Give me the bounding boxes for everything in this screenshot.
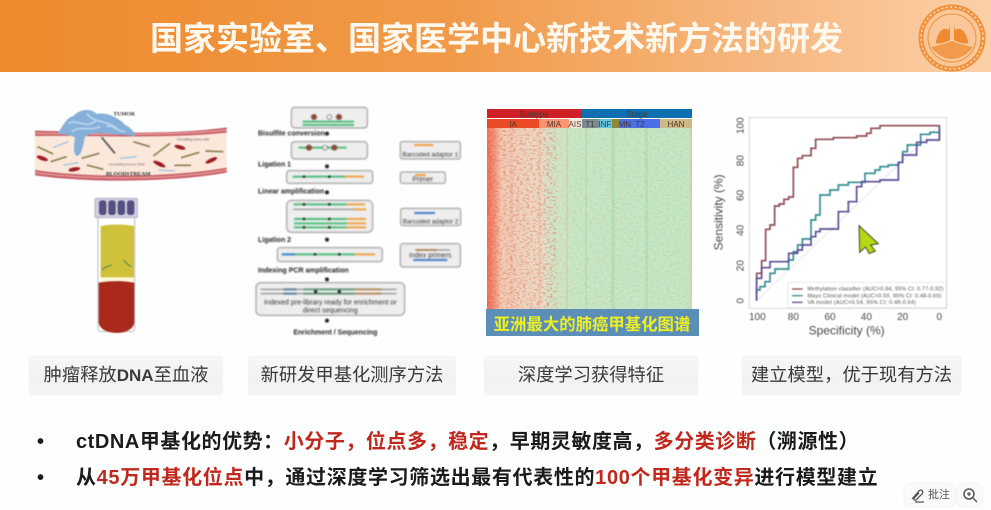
y axis labels: 0 — [735, 297, 746, 303]
panel: ROC chart — [712, 116, 948, 338]
heatmap group bars: AIS — [569, 120, 581, 129]
curve: methylation classifier — [757, 126, 939, 301]
title: 国家实验室、国家医学中心新技术新方法的研发 — [150, 20, 843, 57]
box labels: Barcoded adaptor 1 — [403, 151, 459, 158]
icon: mouse cursor — [859, 226, 878, 254]
step labels: Ligation 1 — [258, 162, 291, 169]
y axis labels: 60 — [735, 189, 746, 201]
x axis labels: 80 — [788, 312, 799, 323]
step labels — [258, 131, 377, 337]
tumor: TUMOR — [113, 112, 136, 118]
x axis labels: 0 — [937, 312, 943, 323]
caption: deep learning — [485, 357, 697, 394]
y axis labels: Sensitivity (%) — [712, 174, 726, 250]
heatmap caption band — [486, 309, 699, 336]
y axis labels — [712, 117, 746, 303]
tumor: Circulating tumor cells — [177, 138, 210, 142]
bullet: model building: • — [37, 467, 44, 489]
methylation sites — [306, 114, 342, 150]
box labels: direct sequencing — [303, 308, 358, 315]
tumor: Circulating tumor DNA — [108, 162, 145, 166]
heatmap group bars: T1 — [585, 120, 595, 129]
legend: VA model (AUC=0.54, 95% CI: 0.48-0.64) — [807, 300, 916, 306]
tumor — [57, 110, 210, 178]
blood vessel — [35, 127, 227, 181]
red blood cells — [36, 144, 218, 172]
heatmap matrix — [487, 128, 692, 310]
bullet: model building: 从45万甲基化位点中，通过深度学习筛选出最有代表性的100个甲基化变异进行模型建立 — [76, 467, 878, 489]
box labels — [264, 151, 459, 315]
y axis labels: 80 — [735, 155, 746, 166]
circulating tumor DNA — [53, 142, 175, 171]
DNA strands — [287, 122, 355, 294]
heatmap group bars: Subtype — [519, 110, 549, 119]
box labels: Index primers — [409, 252, 452, 259]
caption: deep learning: 深度学习获得特征 — [518, 364, 664, 385]
curve: Mayo clinical model — [757, 132, 939, 301]
y axis labels: 40 — [735, 224, 746, 236]
step labels: Bisulfite conversion — [258, 131, 325, 138]
workflow boxes — [256, 107, 461, 315]
toolbar: annotate button — [905, 484, 955, 506]
heatmap group bars: T2 — [635, 120, 645, 129]
blood tube — [95, 198, 137, 333]
adapters and primers — [345, 145, 437, 294]
heatmap group bars: Stage — [627, 110, 648, 119]
x axis labels: 100 — [749, 312, 766, 323]
bullet: advantages: ctDNA甲基化的优势：小分子，位点多，稳定，早期灵敏度高，多分类诊断（溯源性） — [76, 431, 859, 453]
x axis labels: 20 — [897, 312, 909, 323]
toolbar: zoom button — [958, 484, 982, 506]
heatmap group bars: MIA — [547, 120, 562, 129]
x axis labels: 40 — [861, 312, 872, 323]
y axis labels: 100 — [735, 117, 746, 134]
caption: new sequencing method: 新研发甲基化测序方法 — [261, 364, 443, 385]
x axis labels: Specificity (%) — [809, 323, 885, 337]
heatmap group bars — [487, 109, 692, 129]
heatmap group bars: MN — [619, 120, 631, 129]
x axis labels: 60 — [824, 312, 836, 323]
heatmap group bars: INF — [599, 120, 612, 129]
curve: VA model — [757, 127, 939, 301]
bullet: advantages: • — [37, 431, 44, 453]
legend — [788, 282, 946, 308]
caption: model: 建立模型，优于现有方法 — [751, 364, 952, 385]
x axis labels — [749, 312, 943, 337]
heatmap group bars: IA — [509, 120, 517, 129]
legend: Mayo Clinical model (AUC=0.59, 95% CI: 0.48-0.69) — [807, 293, 941, 299]
toolbar: annotate button: 批注 — [928, 489, 950, 501]
logo: lung seal — [918, 4, 986, 72]
header banner — [0, 0, 991, 72]
panel: tumor DNA release illustration — [34, 109, 228, 334]
step labels: Linear amplification — [258, 188, 324, 195]
legend: Methylation classifier (AUC=0.84, 95% CI: 0.77-0.92) — [807, 287, 943, 293]
caption: tumor release — [30, 357, 222, 394]
step labels: Indexing PCR amplification — [258, 267, 349, 274]
caption: model — [743, 357, 960, 394]
tumor: BLOODSTREAM — [106, 172, 151, 178]
caption: new sequencing method — [249, 357, 455, 394]
box labels: Barcoded adaptor 2 — [403, 219, 459, 226]
step labels: Ligation 2 — [258, 237, 291, 244]
panel: methylation heatmap — [486, 109, 699, 336]
heatmap group bars: HAN — [668, 120, 685, 129]
box labels: Primer — [412, 177, 434, 184]
heatmap caption band: 亚洲最大的肺癌甲基化图谱 — [494, 315, 690, 334]
plot frame — [749, 118, 947, 308]
box labels: Indexed pre-library ready for enrichment or — [264, 299, 397, 306]
DNA fragments — [37, 142, 223, 169]
step labels: Enrichment / Sequencing — [293, 330, 377, 337]
y axis labels: 20 — [735, 260, 746, 271]
panel: methylation sequencing workflow — [254, 106, 462, 337]
caption: tumor release: 肿瘤释放DNA至血液 — [44, 364, 208, 385]
